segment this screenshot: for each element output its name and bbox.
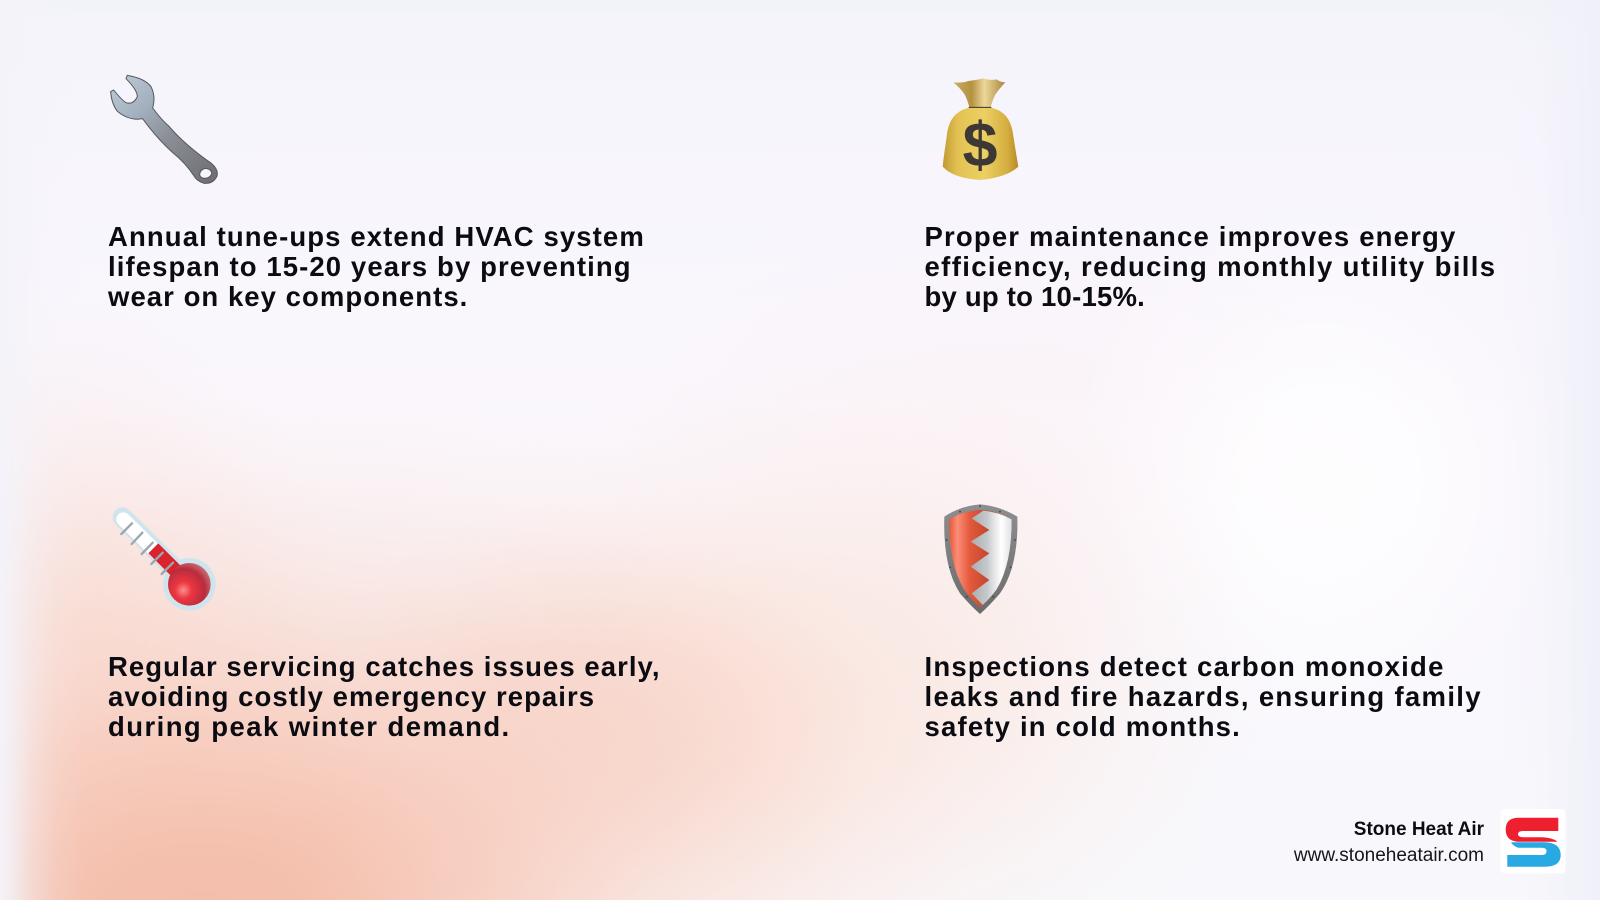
text: efficiency: by up to 10-15%. xyxy=(924,281,1145,312)
icon: wrench xyxy=(110,74,218,184)
brand name: Stone Heat Air xyxy=(1354,819,1484,840)
text: repairs xyxy=(108,651,661,742)
text: lifespan: wear on key components. xyxy=(108,281,468,312)
text: lifespan: lifespan to 15-20 years by preventing xyxy=(108,251,632,282)
text: safety: Inspections detect carbon monoxide xyxy=(924,651,1445,682)
text: lifespan: Annual tune-ups extend HVAC system xyxy=(108,221,645,252)
brand url: www.stoneheatair.com xyxy=(1294,845,1484,866)
text: safety: safety in cold months. xyxy=(924,711,1241,742)
text: safety xyxy=(924,651,1482,742)
text: safety: leaks and fire hazards, ensuring family xyxy=(924,681,1482,712)
text: efficiency xyxy=(924,221,1496,312)
text: efficiency: Proper maintenance improves energy xyxy=(924,221,1456,252)
icon: thermometer xyxy=(112,507,216,611)
text: efficiency: efficiency, reducing monthly utility bills xyxy=(924,251,1496,282)
text: repairs: avoiding costly emergency repairs xyxy=(108,681,595,712)
icon: money bag: $ xyxy=(963,111,997,181)
text: lifespan xyxy=(108,221,645,312)
icon: logo xyxy=(1501,809,1566,874)
icon: shield xyxy=(944,504,1018,614)
text: repairs: during peak winter demand. xyxy=(108,711,511,742)
text: repairs: Regular servicing catches issues early, xyxy=(108,651,661,682)
icon: money bag xyxy=(942,78,1018,181)
